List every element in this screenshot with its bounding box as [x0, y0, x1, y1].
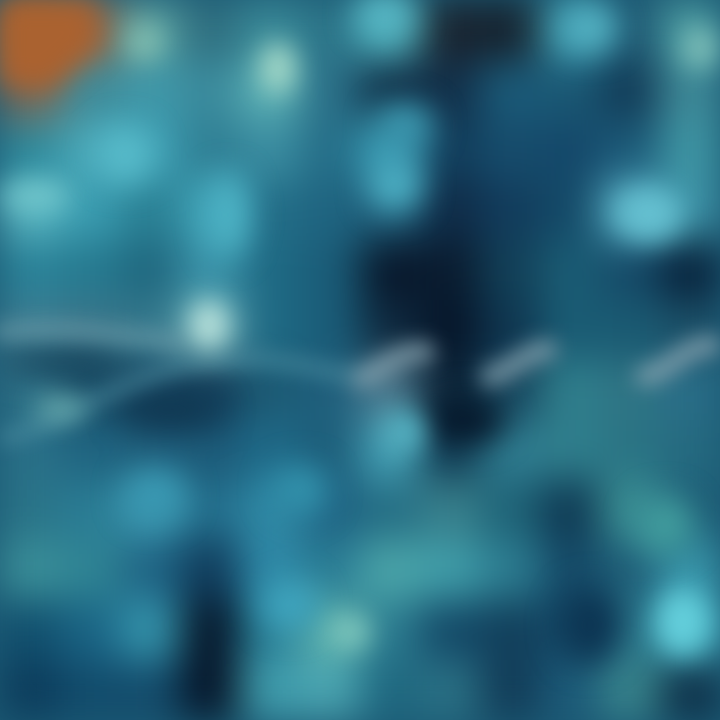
light streaks across the middle [0, 330, 712, 438]
orange corner [0, 0, 100, 90]
